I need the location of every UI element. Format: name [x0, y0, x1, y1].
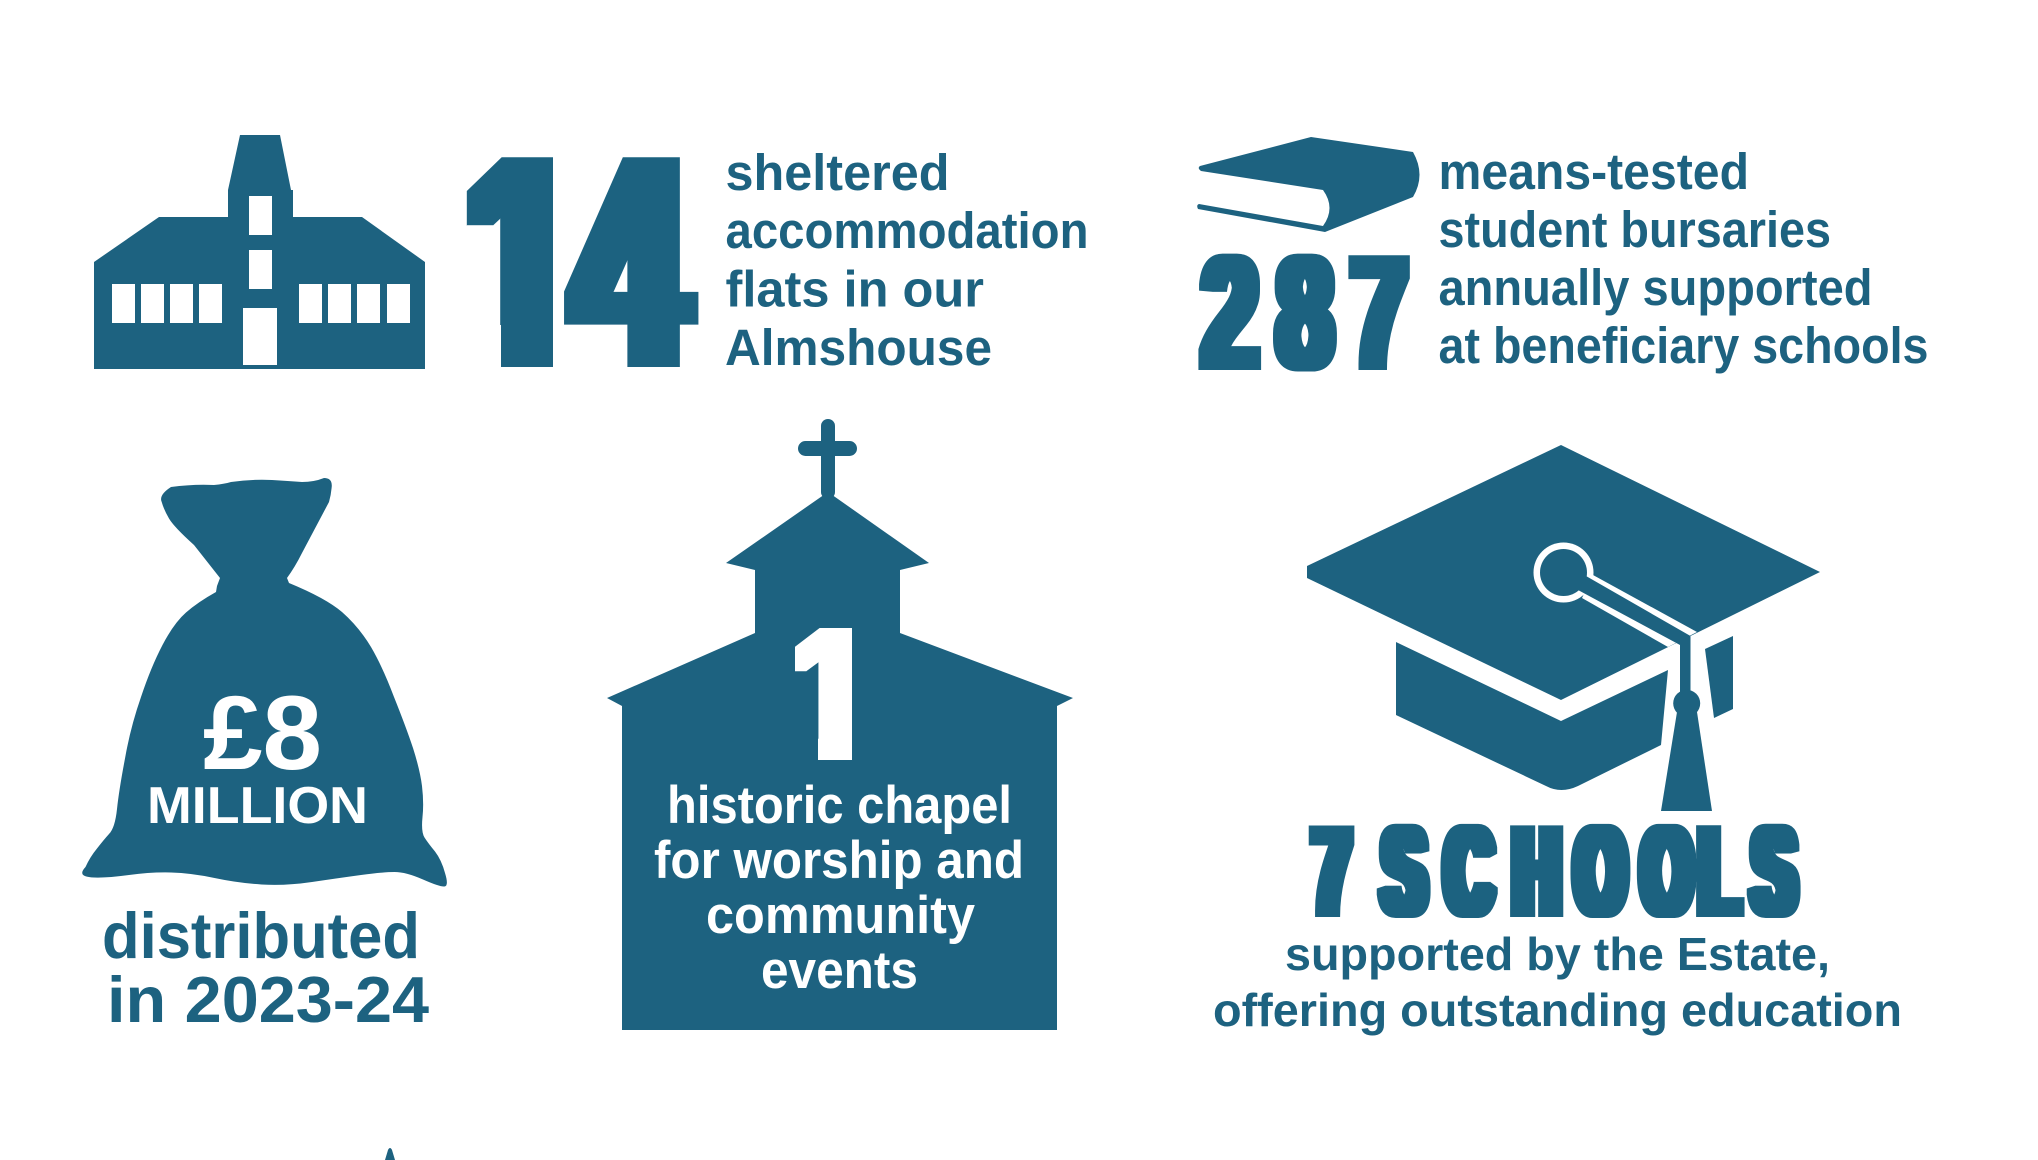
number: 1: 1	[788, 589, 877, 800]
icon: money bag	[82, 478, 447, 887]
text: means-tested student bursaries annually supported at beneficiary schools: means-tested	[1438, 143, 1749, 200]
text: historic chapel for worship and community events: community	[706, 886, 975, 945]
text: distributed in 2023-24: in 2023-24	[107, 963, 429, 1036]
panel: almshouse flats	[94, 135, 1086, 369]
text: supported by the Estate, offering outstanding education: offering outstanding education	[1213, 984, 1902, 1036]
text: sheltered accommodation flats in our Almshouse	[725, 144, 1088, 376]
text: supported by the Estate, offering outstanding education: supported by the Estate,	[1285, 928, 1830, 980]
label: £8 million: £8	[203, 675, 322, 792]
number: 287: 287	[1202, 225, 1407, 402]
heading: 7 schools: 7 SCHOOLS	[1314, 802, 1795, 940]
panel: seven schools	[1213, 445, 1902, 1036]
text: means-tested student bursaries annually supported at beneficiary schools: annually supported	[1438, 259, 1872, 316]
text: means-tested student bursaries annually supported at beneficiary schools: at beneficiary schools	[1438, 317, 1928, 374]
text: sheltered accommodation flats in our Almshouse: flats in our	[726, 260, 984, 318]
text: sheltered accommodation flats in our Almshouse: Almshouse	[725, 319, 992, 376]
label: £8 million	[147, 675, 368, 835]
icon: chapel	[607, 419, 1073, 1030]
icon: book	[1197, 137, 1420, 232]
panel: money distributed	[82, 478, 447, 1036]
text: sheltered accommodation flats in our Almshouse: accommodation	[726, 202, 1088, 259]
text: historic chapel for worship and community events: events	[761, 941, 918, 1000]
panel: historic chapel	[607, 419, 1073, 1030]
text: distributed in 2023-24	[102, 899, 429, 1036]
text: means-tested student bursaries annually supported at beneficiary schools: student bursaries	[1438, 201, 1831, 258]
text: sheltered accommodation flats in our Almshouse: sheltered	[726, 144, 950, 201]
text: supported by the Estate, offering outstanding education	[1213, 928, 1902, 1036]
icon: almshouse building	[94, 135, 425, 369]
number: 14: 14	[466, 93, 688, 431]
text: historic chapel for worship and community events	[654, 776, 1024, 1000]
text: distributed in 2023-24: distributed	[102, 899, 420, 972]
label: £8 million: MILLION	[147, 777, 368, 835]
panel: student bursaries	[1197, 137, 1928, 402]
text: historic chapel for worship and community events: for worship and	[654, 831, 1024, 890]
icon: graduation cap	[1307, 445, 1820, 811]
icon: cropped steeple tip	[385, 1148, 395, 1160]
text: means-tested student bursaries annually supported at beneficiary schools	[1438, 143, 1928, 374]
text: historic chapel for worship and community events: historic chapel	[667, 776, 1012, 835]
